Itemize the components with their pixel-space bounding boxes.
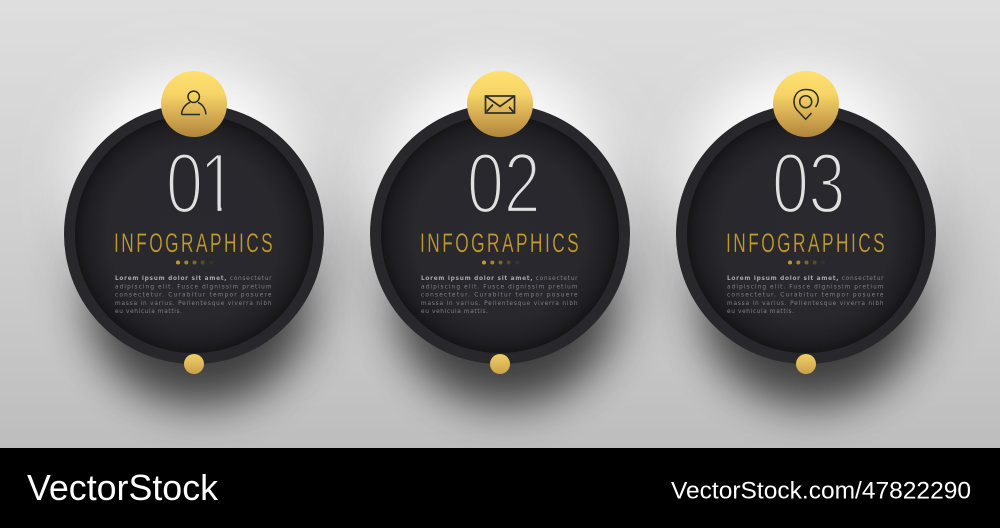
bottom gold dot	[184, 354, 204, 374]
wide soft shadow	[677, 125, 957, 395]
bottom gold dot	[796, 354, 816, 374]
body text: Lorem ipsum dolor sit amet, consectetur	[115, 276, 272, 282]
light glow	[381, 70, 611, 300]
outer ring	[676, 104, 936, 364]
wide soft shadow	[371, 125, 651, 395]
top gold badge	[467, 71, 533, 137]
number: 03	[772, 137, 845, 231]
body text: eu vehicula mattis.	[421, 309, 488, 315]
body text: Lorem ipsum dolor sit amet, consectetur	[727, 276, 884, 282]
watermark bar	[0, 448, 1000, 528]
body text: massa in varius. Pellentesque viverra nibh	[421, 301, 578, 307]
heading: INFOGRAPHICS	[420, 227, 579, 258]
panel: step 02	[370, 70, 651, 405]
icon: location pin	[794, 90, 818, 119]
icon: envelope	[486, 96, 514, 113]
wide soft shadow	[65, 125, 345, 395]
top gold badge	[773, 71, 839, 137]
pagination dots	[482, 260, 519, 264]
body text: adipiscing elit. Fusce dignissim pretium	[727, 284, 884, 290]
top gold badge	[161, 71, 227, 137]
icon: person	[182, 91, 206, 114]
panel: step 01	[64, 70, 345, 405]
number: 02	[467, 137, 541, 231]
body text	[115, 276, 272, 315]
heading: INFOGRAPHICS	[726, 227, 885, 258]
outer ring	[370, 104, 630, 364]
body text: massa in varius. Pellentesque viverra nibh	[115, 301, 272, 307]
body text: massa in varius. Pellentesque viverra nibh	[727, 301, 884, 307]
body text: eu vehicula mattis.	[727, 309, 794, 315]
drop shadow	[400, 215, 610, 405]
body text: adipiscing elit. Fusce dignissim pretium	[115, 284, 272, 290]
inner disc	[75, 115, 313, 353]
light glow	[687, 70, 917, 300]
drop shadow	[706, 215, 916, 405]
body text	[421, 276, 578, 315]
number: 01	[166, 137, 236, 231]
light glow	[75, 70, 305, 300]
body text: consectetur. Curabitur tempor posuere	[115, 293, 272, 299]
watermark url: VectorStock.com/47822290	[671, 478, 971, 504]
inner disc	[687, 115, 925, 353]
body text: eu vehicula mattis.	[115, 309, 182, 315]
body text: Lorem ipsum dolor sit amet, consectetur	[421, 276, 578, 282]
pagination dots	[176, 260, 213, 264]
bottom gold dot	[490, 354, 510, 374]
panel: step 03	[676, 70, 957, 405]
heading: INFOGRAPHICS	[114, 227, 273, 258]
body text: consectetur. Curabitur tempor posuere	[727, 293, 884, 299]
watermark logo: VectorStock	[27, 467, 219, 508]
body text	[727, 276, 884, 315]
body text: consectetur. Curabitur tempor posuere	[421, 293, 578, 299]
inner disc	[381, 115, 619, 353]
outer ring	[64, 104, 324, 364]
body text: adipiscing elit. Fusce dignissim pretium	[421, 284, 578, 290]
pagination dots	[788, 260, 825, 264]
drop shadow	[94, 215, 304, 405]
